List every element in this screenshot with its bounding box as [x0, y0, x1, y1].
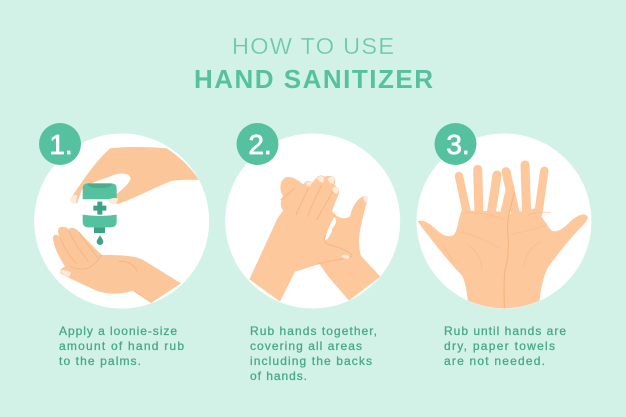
icon: sanitizer foam	[325, 217, 336, 241]
text: step 2 instructions	[250, 324, 377, 383]
text: step 3 instructions: dry, paper towels	[444, 339, 555, 353]
white circle 1	[34, 134, 209, 308]
icon: left open hand	[418, 169, 508, 308]
text: step 3 instructions: Rub until hands are	[444, 324, 566, 338]
text: step 1 instructions	[59, 324, 184, 368]
badge: number 1: 1.	[49, 129, 73, 160]
badge: number 3: 3.	[446, 129, 470, 160]
icon: front hand	[249, 175, 340, 302]
text: step 2 instructions: Rub hands together,	[250, 324, 377, 338]
text: step 3 instructions: are not needed.	[444, 354, 545, 368]
center seam between hands	[504, 192, 514, 308]
white circle 2	[225, 134, 400, 308]
panel: step 2 illustration	[225, 134, 400, 308]
title: hand sanitizer: HAND SANITIZER	[194, 64, 433, 94]
icon: lower open hand	[53, 227, 181, 303]
title: how to use: HOW TO USE	[232, 33, 394, 59]
text: step 1 instructions: Apply a loonie-size	[59, 324, 177, 338]
text: step 3 instructions	[444, 324, 566, 368]
text: step 1 instructions: amount of hand rub	[59, 339, 184, 353]
icon: crossing index finger	[503, 188, 510, 218]
badge: number 1	[39, 123, 81, 165]
badge: number 2: 2.	[248, 129, 272, 160]
text: step 2 instructions: including the backs	[250, 354, 372, 368]
icon: back hand	[280, 177, 380, 301]
text: step 2 instructions: covering all areas	[250, 339, 362, 353]
panel: step 3 illustration	[416, 134, 592, 308]
panel: step 1 illustration	[34, 134, 209, 308]
text: step 1 instructions: to the palms.	[59, 354, 141, 368]
icon: sanitizer bottle	[61, 183, 118, 277]
icon: upper hand holding bottle	[71, 147, 199, 204]
icon: right open hand	[505, 165, 588, 308]
badge: number 3	[434, 123, 476, 165]
white circle 3	[416, 134, 592, 308]
badge: number 2	[236, 123, 278, 165]
text: step 2 instructions: of hands.	[250, 369, 307, 383]
